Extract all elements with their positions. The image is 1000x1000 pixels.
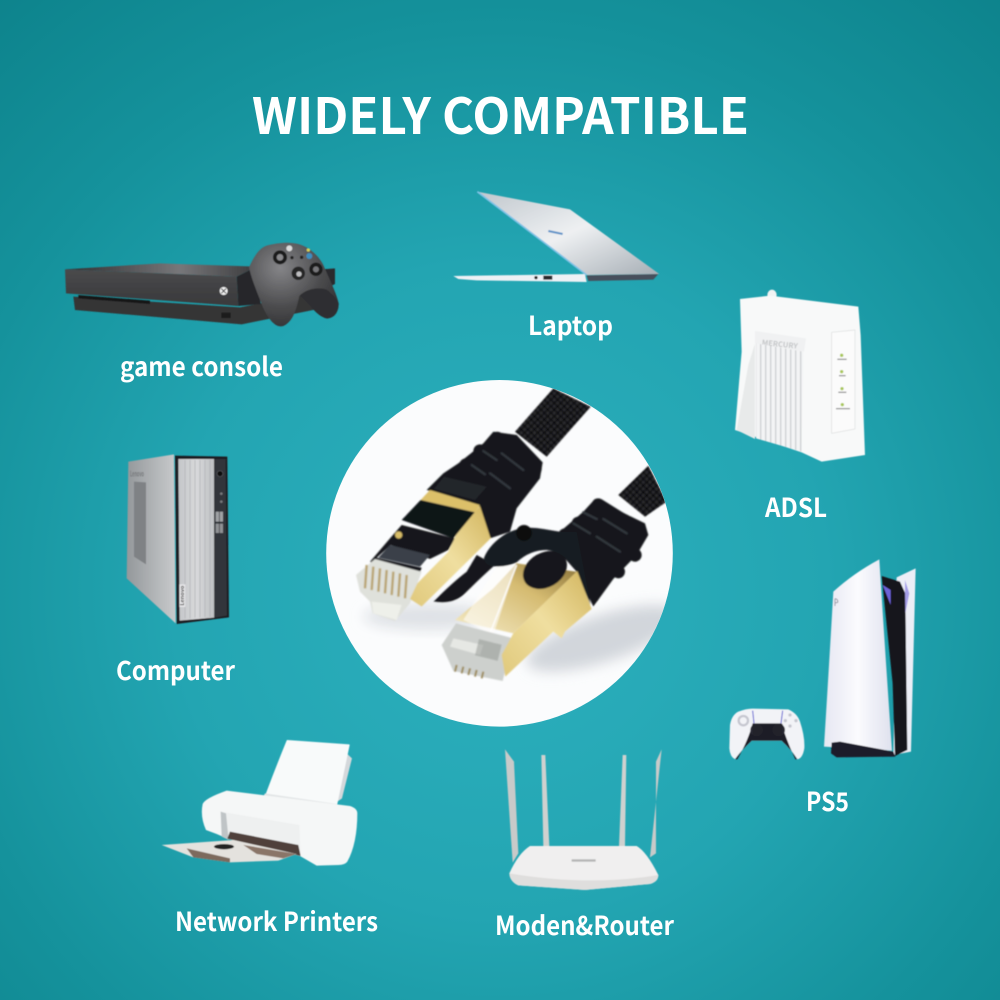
icon: router <box>505 749 662 890</box>
lower latch arch <box>484 528 591 605</box>
device: modem and router <box>495 749 675 943</box>
lower gold side <box>502 571 592 677</box>
icon: ADSL modem <box>735 290 865 462</box>
upper black latch <box>402 500 475 538</box>
device: game console <box>65 243 339 384</box>
upper gold side <box>410 506 491 607</box>
upper boot body <box>427 432 543 538</box>
label: PS5: PS5 <box>806 782 849 819</box>
device: network printer <box>162 741 378 939</box>
circle background <box>326 380 673 727</box>
center photo: ethernet cable <box>326 380 687 727</box>
lower boot body <box>563 501 650 607</box>
lower cable <box>618 466 667 517</box>
rear clip <box>433 555 495 602</box>
upper top gold band <box>421 490 480 512</box>
label: computer: Computer <box>116 651 236 688</box>
device: laptop <box>453 192 659 343</box>
lower boot ribs <box>565 505 638 572</box>
lower clear plug <box>442 623 513 681</box>
icon: desktop tower: Lenovo <box>130 469 144 480</box>
icon: desktop tower: Lenovo <box>179 586 186 606</box>
DualSense controller <box>729 709 804 759</box>
upper boot ribs <box>466 438 535 498</box>
upper clear plug <box>356 559 422 621</box>
label: ADSL: ADSL <box>764 488 827 525</box>
icon: RJ45 cable connectors <box>356 388 687 685</box>
icon: PS5 console and controller <box>729 559 916 759</box>
device: computer <box>116 454 236 688</box>
label: modem and router: Moden&Router <box>495 906 675 943</box>
label: network printers: Network Printers <box>175 902 378 939</box>
icon: xbox console and controller <box>65 243 339 326</box>
label: laptop: Laptop <box>528 306 613 343</box>
icon: ADSL modem: MERCURY <box>761 337 799 352</box>
device: ADSL <box>735 290 865 525</box>
icon: printer <box>162 741 357 866</box>
upper cable <box>515 388 591 457</box>
title: WIDELY COMPATIBLE <box>252 77 749 149</box>
icon: laptop <box>453 192 659 282</box>
device: PS5 <box>729 559 916 819</box>
lower inner gold <box>455 563 577 633</box>
label: game console: game console <box>120 347 283 384</box>
icon: desktop tower <box>127 454 229 624</box>
